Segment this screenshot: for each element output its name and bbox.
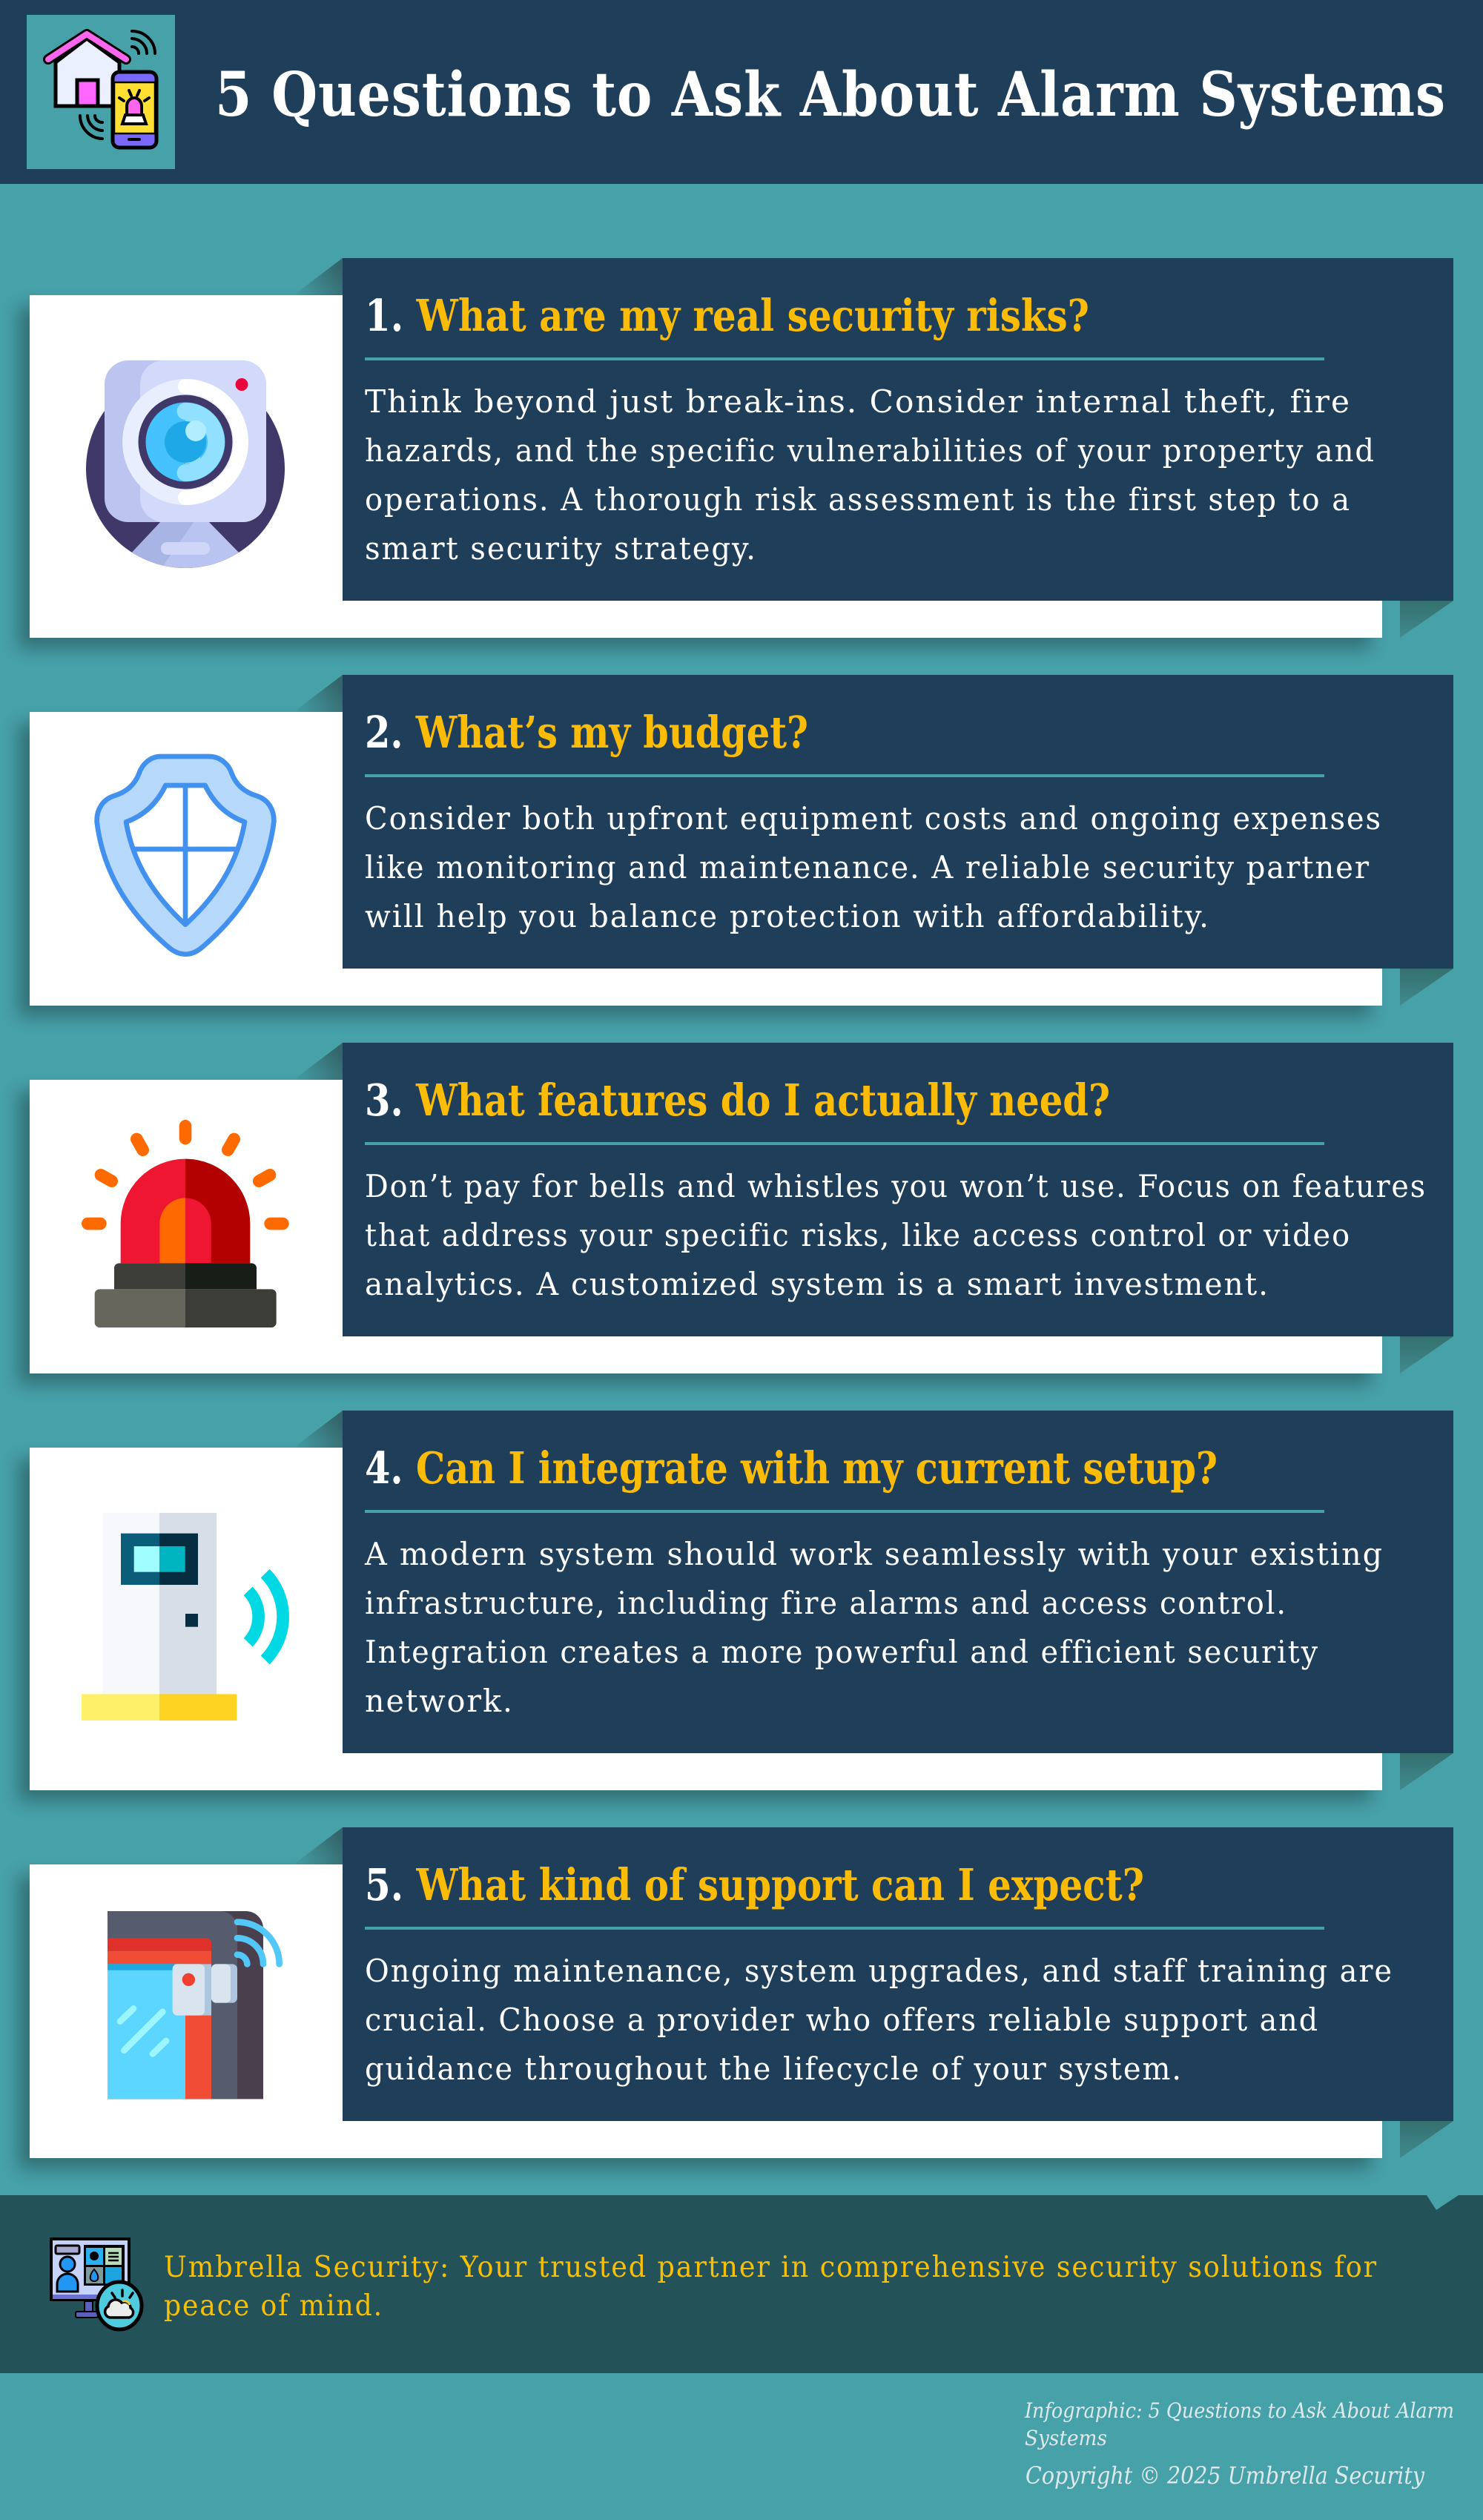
credit text (1024, 2398, 1454, 2490)
body text: question 1: smart security strategy. (365, 530, 757, 567)
body text: question 2: will help you balance protection with affordability. (365, 898, 1210, 934)
footer tagline (164, 2251, 1378, 2323)
body text: question 4: infrastructure, including fire alarms and access control. (365, 1585, 1287, 1621)
body text: question 5: Ongoing maintenance, system upgrades, and staff training are (365, 1953, 1393, 1989)
credit text: Copyright © 2025 Umbrella Security (1025, 2461, 1425, 2490)
icon: shield (97, 756, 274, 954)
credit text: Systems (1025, 2426, 1107, 2450)
icon: window sensor (108, 1911, 280, 2099)
panel: question 3 (19, 1043, 1453, 1385)
body text: question 4: network. (365, 1683, 514, 1719)
footer tagline: peace of mind. (164, 2289, 383, 2323)
body text: question 1 (365, 383, 1375, 567)
heading: question 3: 3. What features do I actually need? (365, 1075, 1110, 1126)
heading: question 5: 5. What kind of support can I expect? (365, 1859, 1144, 1910)
icon: house and phone alarm logo (27, 15, 175, 169)
body text: question 5: guidance throughout the lifecycle of your system. (365, 2051, 1183, 2087)
body text: question 4: Integration creates a more powerful and efficient security (365, 1634, 1319, 1670)
body text: question 3: that address your specific risks, like access control or video (365, 1217, 1351, 1253)
body text: question 2: Consider both upfront equipment costs and ongoing expenses (365, 800, 1382, 837)
heading: question 4: 4. Can I integrate with my current setup? (365, 1442, 1218, 1494)
body text: question 4 (364, 1536, 1384, 1719)
body text: question 3 (365, 1168, 1427, 1302)
heading: question 1: 1. What are my real security risks? (365, 290, 1089, 341)
icon: wireless door panel (82, 1513, 283, 1721)
header band (0, 0, 1483, 184)
body text: question 4: A modern system should work seamlessly with your existing (364, 1536, 1384, 1572)
footer band (0, 2195, 1483, 2373)
panel: question 5 (19, 1827, 1453, 2169)
body text: question 1: Think beyond just break-ins. Consider internal theft, fire (365, 383, 1351, 420)
body text: question 3: Don’t pay for bells and whistles you won’t use. Focus on features (365, 1168, 1427, 1204)
panel: question 1 (19, 258, 1453, 649)
heading: question 2: 2. What’s my budget? (365, 707, 808, 758)
credit text: Infographic: 5 Questions to Ask About Alarm (1024, 2398, 1454, 2423)
body text: question 5 (365, 1953, 1393, 2087)
icon: red siren (87, 1126, 283, 1327)
body text: question 2: like monitoring and maintenance. A reliable security partner (365, 849, 1370, 885)
body text: question 5: crucial. Choose a provider who offers reliable support and (365, 2002, 1319, 2038)
footer tagline: Umbrella Security: Your trusted partner in comprehensive security solutions for (164, 2251, 1378, 2284)
panel: question 2 (19, 675, 1453, 1017)
body text: question 2 (365, 800, 1382, 934)
icon: monitor with weather badge (51, 2239, 142, 2329)
body text: question 1: hazards, and the specific vulnerabilities of your property and (365, 432, 1375, 469)
body text: question 3: analytics. A customized system is a smart investment. (365, 1266, 1269, 1302)
panel: question 4 (19, 1411, 1453, 1801)
icon: security camera (86, 360, 285, 578)
body text: question 1: operations. A thorough risk assessment is the first step to a (365, 481, 1351, 518)
